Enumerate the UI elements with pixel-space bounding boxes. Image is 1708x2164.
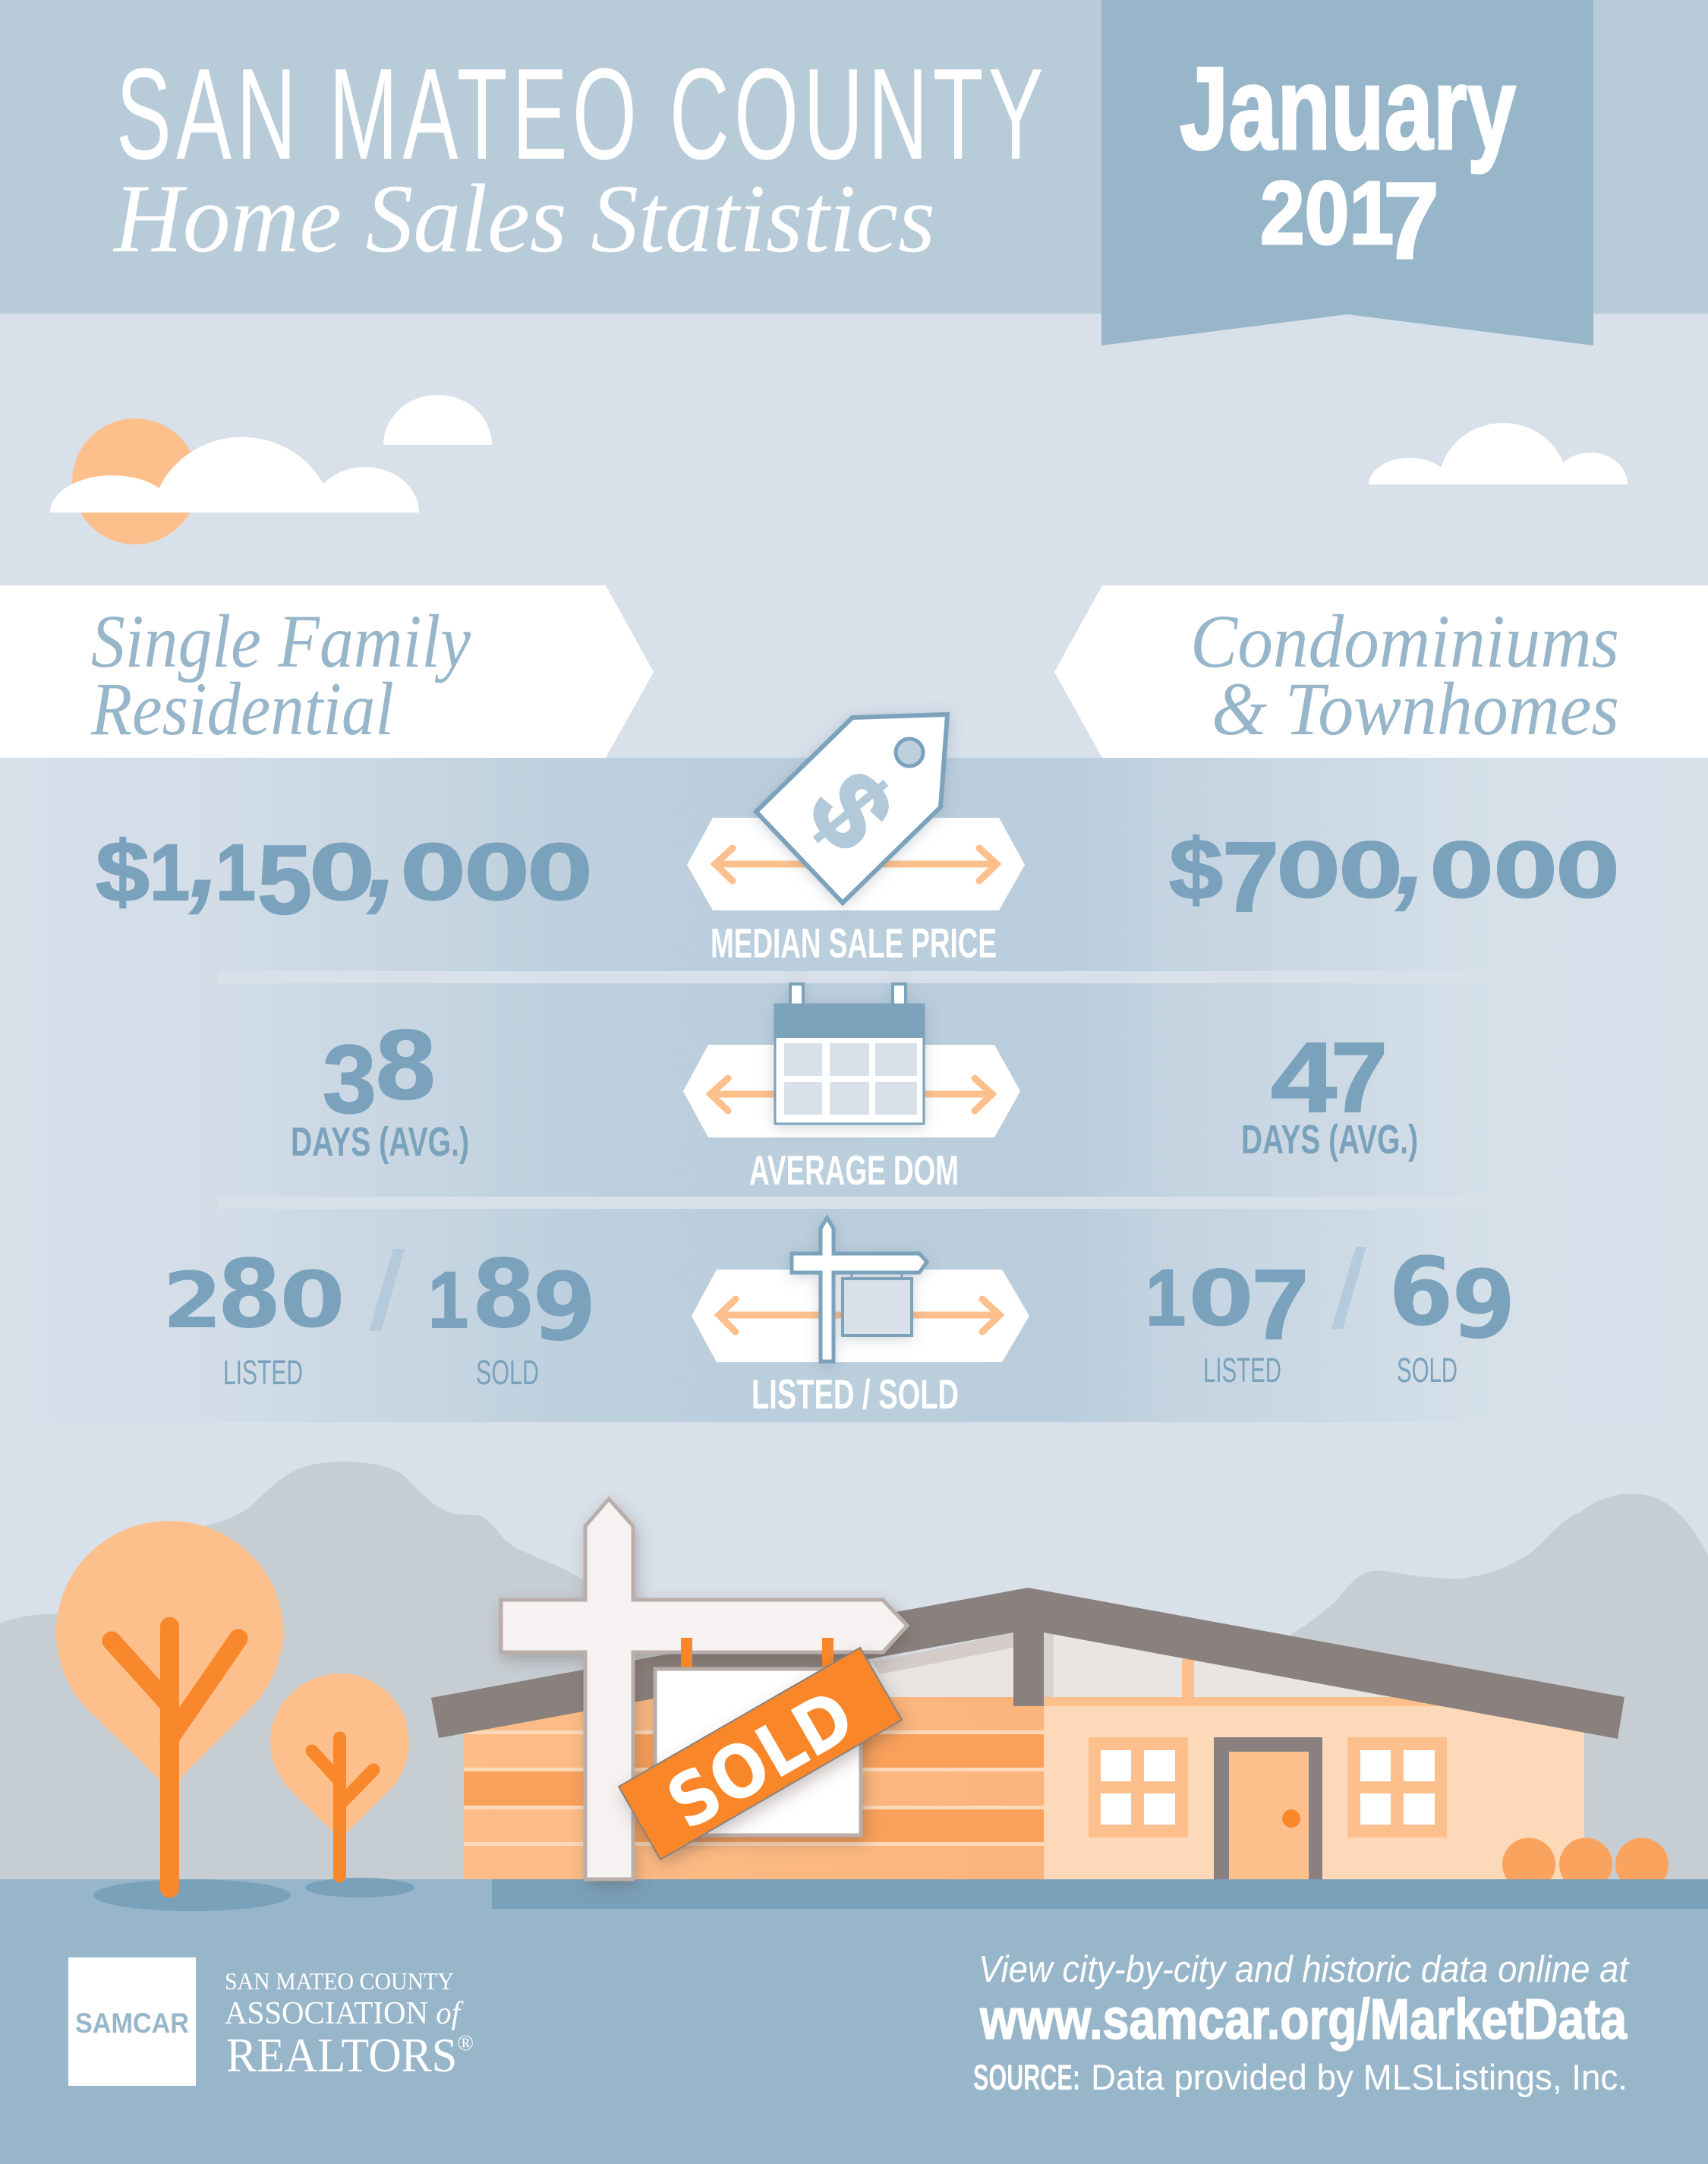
median price left: 5 xyxy=(257,825,312,935)
sold text: SOLD xyxy=(654,1673,868,1847)
number sold: 9 xyxy=(1451,1251,1516,1360)
number sold: 8 xyxy=(471,1240,536,1349)
median price right: 7 xyxy=(1222,821,1279,932)
small cloud xyxy=(383,395,492,445)
listed sold left: 2 xyxy=(162,1256,222,1346)
median price left: $ xyxy=(96,824,150,920)
subtitle: Home Sales Statistics xyxy=(112,164,935,273)
dom left: 3 xyxy=(323,1025,377,1133)
association name: SAN MATEO COUNTY xyxy=(225,1967,454,1995)
hills left xyxy=(0,1462,759,1879)
label: average dom: AVERAGE DOM xyxy=(749,1147,959,1194)
association name: ® xyxy=(457,2030,474,2055)
banner text: Single Family xyxy=(91,599,471,683)
sun and clouds left xyxy=(50,418,419,544)
sold sign xyxy=(501,1499,907,1879)
dom right: 4 xyxy=(1271,1021,1337,1133)
slash xyxy=(1331,1247,1366,1329)
listed sold left xyxy=(162,1240,597,1392)
icon: calendar with arrows xyxy=(683,984,1020,1137)
icon: price tag with arrows xyxy=(687,714,1025,910)
roof xyxy=(431,1588,1624,1739)
association name xyxy=(225,1967,474,2082)
median price left: 0 xyxy=(463,828,531,919)
window right xyxy=(1347,1737,1447,1838)
title: SAN MATEO COUNTY xyxy=(116,42,1048,187)
footer logo xyxy=(68,1957,196,2086)
tree small xyxy=(270,1673,414,1897)
median price left: , xyxy=(365,793,399,921)
footer source: Data provided by MLSListings, Inc. xyxy=(1091,2057,1628,2097)
median price right: 0 xyxy=(1555,826,1621,916)
footer source: SOURCE: xyxy=(973,2057,1080,2097)
foreground strip xyxy=(492,1879,1708,1909)
label: median sale price: MEDIAN SALE PRICE xyxy=(711,920,997,967)
median price left: 0 xyxy=(526,828,594,919)
bushes xyxy=(1502,1838,1669,1879)
dom left: 8 xyxy=(373,1012,439,1121)
door xyxy=(1214,1737,1322,1879)
dom left unit: DAYS (AVG.) xyxy=(291,1119,469,1165)
stat panel shading xyxy=(0,758,1708,1423)
sign board xyxy=(655,1669,861,1835)
ribbon year: 7 xyxy=(1383,161,1439,282)
tree large xyxy=(56,1521,291,1911)
hills right xyxy=(1291,1494,1708,1879)
footer note: View city-by-city and historic data online at xyxy=(978,1949,1630,1990)
sold caption: SOLD xyxy=(476,1353,539,1392)
association name: ASSOCIATION of xyxy=(225,1996,464,2031)
dom right unit: DAYS (AVG.) xyxy=(1241,1117,1418,1162)
ribbon month: January xyxy=(1180,43,1516,174)
listed sold right: 1 xyxy=(1145,1254,1186,1342)
listed sold left: 8 xyxy=(217,1240,282,1349)
median price left: 0 xyxy=(399,828,467,919)
median price left: , xyxy=(188,793,221,921)
sold banner xyxy=(619,1648,902,1860)
listed caption: LISTED xyxy=(223,1353,303,1392)
window left xyxy=(1089,1737,1188,1838)
association name: REALTORS xyxy=(226,2029,468,2082)
ground xyxy=(0,1879,1708,2164)
listed sold right xyxy=(1145,1238,1516,1390)
median price right: 0 xyxy=(1275,826,1341,916)
dom right: 7 xyxy=(1331,1021,1388,1133)
median price left: 1 xyxy=(216,828,256,917)
median price right: $ xyxy=(1169,822,1223,917)
date ribbon xyxy=(1101,0,1593,345)
house xyxy=(431,1588,1624,1879)
hangers xyxy=(686,1638,827,1670)
number sold: 6 xyxy=(1388,1238,1454,1347)
number sold: 1 xyxy=(428,1256,468,1345)
median price left: 0 xyxy=(308,828,376,919)
slash xyxy=(369,1249,405,1331)
banner text: Residential xyxy=(90,667,394,751)
banner text: & Townhomes xyxy=(1212,667,1619,751)
listed sold right: 0 xyxy=(1188,1254,1254,1343)
logo text: SAMCAR xyxy=(75,2008,189,2039)
listed sold left: 0 xyxy=(279,1255,345,1345)
icon: sign post with arrows xyxy=(692,1218,1029,1362)
median price right: 0 xyxy=(1492,826,1558,916)
banner: condominiums xyxy=(1054,585,1708,758)
banner: single family xyxy=(0,585,654,758)
median price right: 0 xyxy=(1429,826,1495,916)
number sold: 9 xyxy=(532,1253,597,1362)
icon: price tag with arrows: $ xyxy=(785,749,917,872)
median price right: 0 xyxy=(1338,826,1404,916)
median price left: 1 xyxy=(150,828,190,917)
median price right: , xyxy=(1394,790,1427,918)
banner text: Condominiums xyxy=(1190,599,1619,683)
listed sold right: 7 xyxy=(1252,1248,1309,1360)
ribbon year: 201 xyxy=(1260,163,1394,263)
header band xyxy=(0,0,1708,314)
label: listed sold: LISTED / SOLD xyxy=(752,1371,959,1418)
sold caption: SOLD xyxy=(1397,1351,1457,1390)
listed caption: LISTED xyxy=(1203,1351,1281,1390)
cloud right xyxy=(1369,423,1628,484)
